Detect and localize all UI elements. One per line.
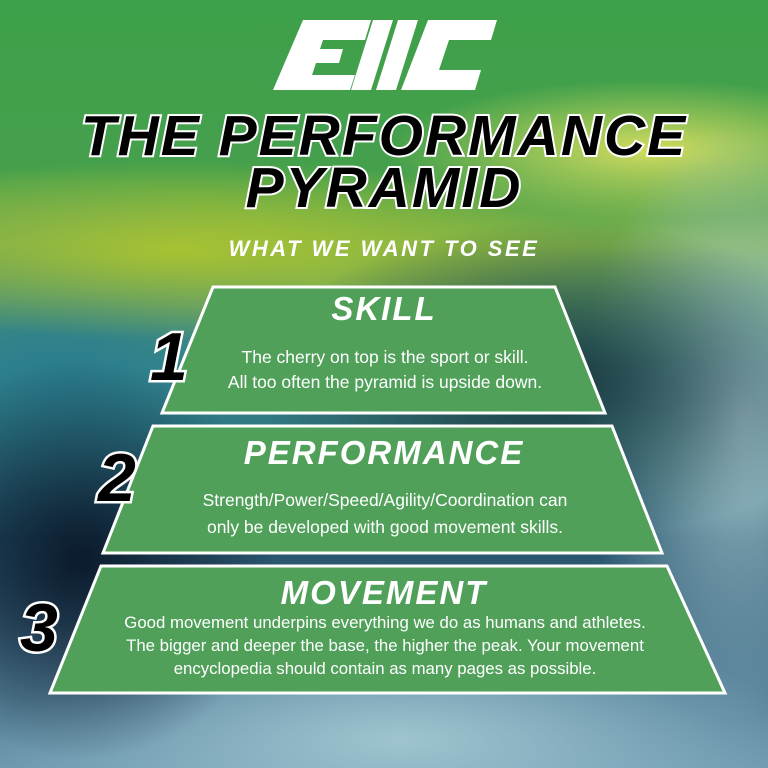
tier 3 text: Good movement underpins everything we do as humans and athletes. xyxy=(124,613,646,632)
tier 3 text: encyclopedia should contain as many pages as possible. xyxy=(174,659,596,678)
tier 1 text xyxy=(228,347,542,392)
tier 3 heading: MOVEMENT xyxy=(281,574,487,611)
tier 1 heading: SKILL xyxy=(331,290,437,327)
tier 2 heading: PERFORMANCE xyxy=(244,434,524,471)
subtitle: WHAT WE WANT TO SEE xyxy=(229,236,539,261)
title xyxy=(81,104,689,220)
number 2: 2 xyxy=(98,440,136,516)
number 3: 3 xyxy=(20,590,58,666)
number 1: 1 xyxy=(150,319,188,395)
tier 2 text xyxy=(203,490,567,537)
logo xyxy=(273,20,497,90)
tier 3 text xyxy=(124,613,646,678)
tier 2 text: only be developed with good movement skills. xyxy=(207,517,563,537)
tier 1 shape xyxy=(162,287,605,413)
tier 1 text: The cherry on top is the sport or skill. xyxy=(242,347,528,367)
tier 1 text: All too often the pyramid is upside down. xyxy=(228,372,542,392)
tier 3 text: The bigger and deeper the base, the higher the peak. Your movement xyxy=(126,636,644,655)
title: PYRAMID xyxy=(246,156,522,220)
tier 2 shape xyxy=(103,426,662,553)
tier 2 text: Strength/Power/Speed/Agility/Coordination can xyxy=(203,490,567,510)
tier 3 shape xyxy=(50,566,725,693)
title: THE PERFORMANCE xyxy=(81,104,687,168)
